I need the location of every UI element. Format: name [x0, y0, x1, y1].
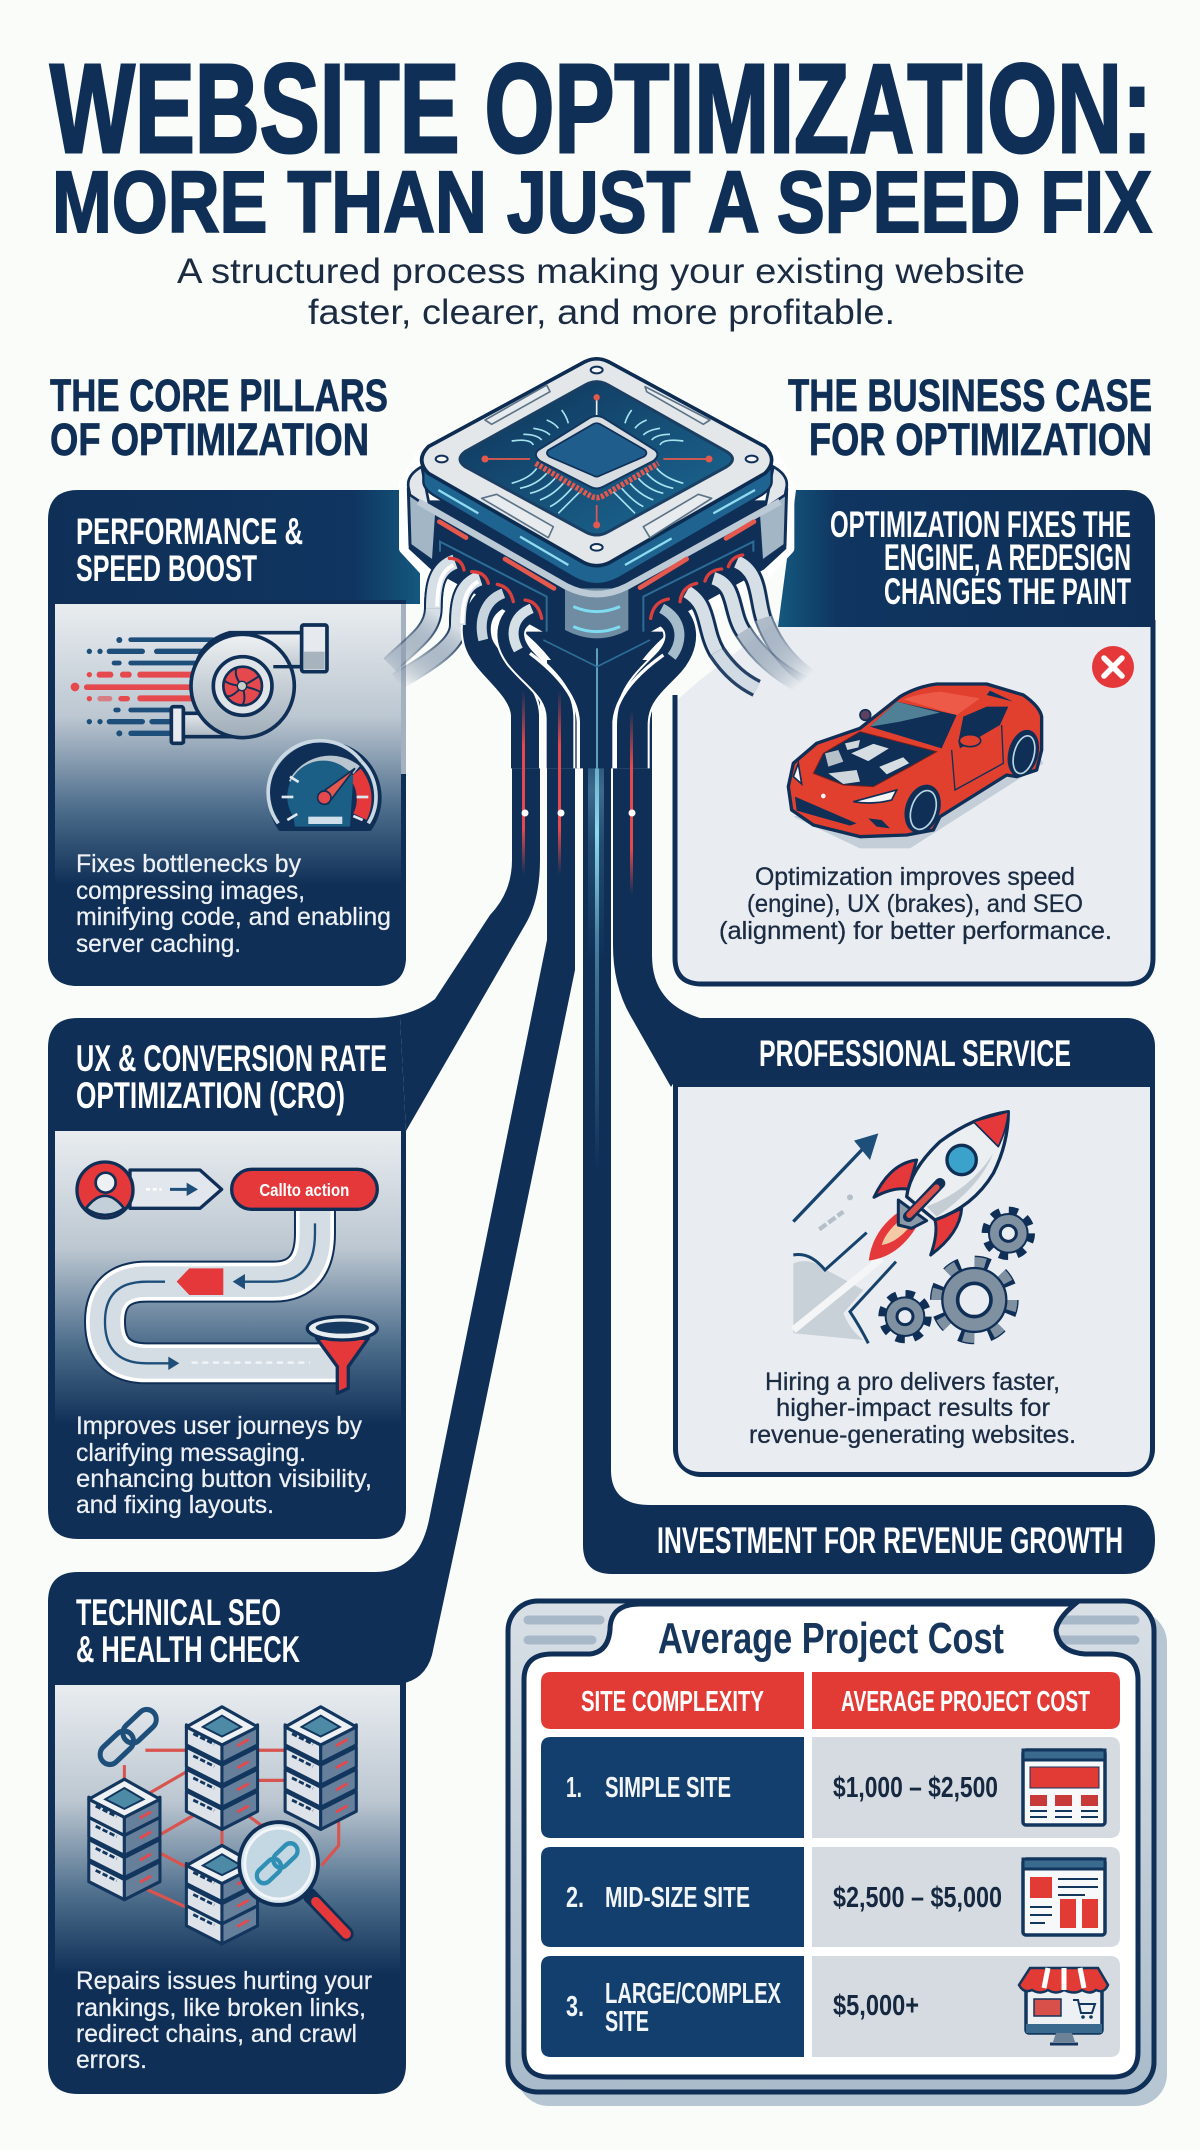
table header: SITE COMPLEXITY — [581, 1686, 764, 1718]
subtitle: faster, clearer, and more profitable. — [308, 293, 895, 332]
description: Hiring a pro delivers faster, — [765, 1368, 1060, 1396]
heading: SPEED BOOST — [76, 548, 257, 589]
row: simple site: 1. — [566, 1772, 582, 1804]
icon: user journey — [77, 1162, 377, 1393]
heading: PERFORMANCE & — [76, 511, 303, 552]
panel: average project cost table — [508, 1601, 1167, 2106]
table title: Average Project Cost — [658, 1614, 1004, 1663]
row: simple site: $1,000 – $2,500 — [833, 1772, 998, 1804]
heading: OPTIMIZATION (CRO) — [76, 1075, 345, 1116]
description: Improves user journeys by — [76, 1412, 362, 1440]
description — [749, 1368, 1076, 1449]
corner blocks — [408, 488, 437, 562]
red slots — [439, 522, 754, 588]
cable ends over body — [433, 562, 763, 657]
icon: rocket with gears — [793, 1112, 1030, 1343]
central processor hub with cables — [390, 358, 810, 768]
panel: optimization fixes the engine — [675, 490, 1155, 984]
description: Fixes bottlenecks by — [76, 850, 301, 878]
icon: gears — [883, 1211, 1030, 1339]
description: enhancing button visibility, — [76, 1465, 372, 1493]
top plate — [422, 359, 772, 566]
panel: UX and conversion rate optimization — [48, 1018, 406, 1539]
heading: core pillars: THE CORE PILLARS — [50, 370, 388, 421]
screen — [460, 382, 732, 535]
subtitle — [177, 252, 1025, 332]
description: revenue-generating websites. — [749, 1421, 1076, 1449]
row: large complex site — [541, 1956, 1120, 2057]
row: simple site — [541, 1737, 1120, 1838]
chip — [536, 463, 658, 498]
white halo — [405, 358, 788, 642]
row: large complex site: $5,000+ — [833, 1990, 919, 2022]
heading — [830, 504, 1131, 612]
icon: online store — [1019, 1968, 1108, 2044]
description: (alignment) for better performance. — [719, 917, 1112, 945]
title — [50, 38, 1152, 251]
heading: TECHNICAL SEO — [76, 1592, 281, 1633]
description: (engine), UX (brakes), and SEO — [747, 890, 1083, 918]
heading — [76, 1038, 387, 1116]
table header — [541, 1672, 1120, 1729]
heading — [76, 511, 303, 589]
connector: trunk and investment bar — [583, 640, 1155, 1574]
description — [76, 1967, 372, 2074]
icon: user journey: Callto action — [259, 1180, 349, 1200]
description: errors. — [76, 2046, 147, 2074]
heading: core pillars: OF OPTIMIZATION — [50, 414, 369, 465]
heading: UX & CONVERSION RATE — [76, 1038, 387, 1079]
icon: magnifier — [239, 1822, 346, 1934]
description: compressing images, — [76, 877, 305, 905]
cable red rings — [449, 555, 743, 618]
icon: speedometer — [268, 741, 380, 829]
cable highlights — [522, 690, 636, 895]
description: server caching. — [76, 930, 241, 958]
icon: multi column page — [1023, 1859, 1105, 1935]
panel: technical SEO and health check — [48, 1572, 406, 2094]
description — [76, 850, 391, 958]
description — [719, 863, 1112, 945]
row: mid-size site: $2,500 – $5,000 — [833, 1882, 1002, 1914]
description — [76, 1412, 372, 1519]
description: clarifying messaging. — [76, 1439, 306, 1467]
cables: light left and right tails — [390, 562, 810, 685]
icon: landing page — [1023, 1750, 1105, 1825]
cables: dark — [477, 592, 757, 768]
icon: red sports car with open hood — [788, 684, 1044, 848]
subtitle: A structured process making your existing website — [177, 252, 1025, 291]
row: mid-size site: MID-SIZE SITE — [605, 1882, 750, 1914]
steel band — [423, 460, 772, 584]
description: higher-impact results for — [776, 1394, 1050, 1422]
row: simple site: SIMPLE SITE — [605, 1772, 731, 1804]
description: and fixing layouts. — [76, 1491, 274, 1519]
row: mid-size site — [541, 1847, 1120, 1947]
description: rankings, like broken links, — [76, 1994, 366, 2022]
icon: server network with broken link search — [89, 1705, 356, 1944]
connector: cable to SEO panel — [375, 660, 575, 1684]
connector: cable to professional service panel — [613, 660, 700, 1087]
icon: chain link — [96, 1705, 160, 1769]
description: minifying code, and enabling — [76, 903, 391, 931]
panel: performance and speed — [48, 490, 420, 986]
description: redirect chains, and crawl — [76, 2020, 357, 2048]
row: large complex site: 3. — [566, 1991, 584, 2023]
row: large complex site: LARGE/COMPLEX — [605, 1978, 781, 2010]
icon: red x badge — [1092, 646, 1134, 688]
tab stripes — [528, 1620, 1135, 1640]
description: Repairs issues hurting your — [76, 1967, 372, 1995]
heading: business case — [788, 370, 1152, 465]
panel: professional service — [673, 1018, 1155, 1477]
row: large complex site: SITE — [605, 2006, 649, 2038]
row: mid-size site: 2. — [566, 1882, 584, 1914]
heading: core pillars — [50, 370, 388, 465]
icon: turbocharger — [71, 625, 327, 743]
heading — [76, 1592, 300, 1670]
neck — [523, 632, 670, 768]
description: Optimization improves speed — [755, 863, 1075, 891]
heading: & HEALTH CHECK — [76, 1629, 300, 1670]
lower body — [410, 502, 785, 647]
connector: cable to UX panel — [370, 660, 540, 1131]
